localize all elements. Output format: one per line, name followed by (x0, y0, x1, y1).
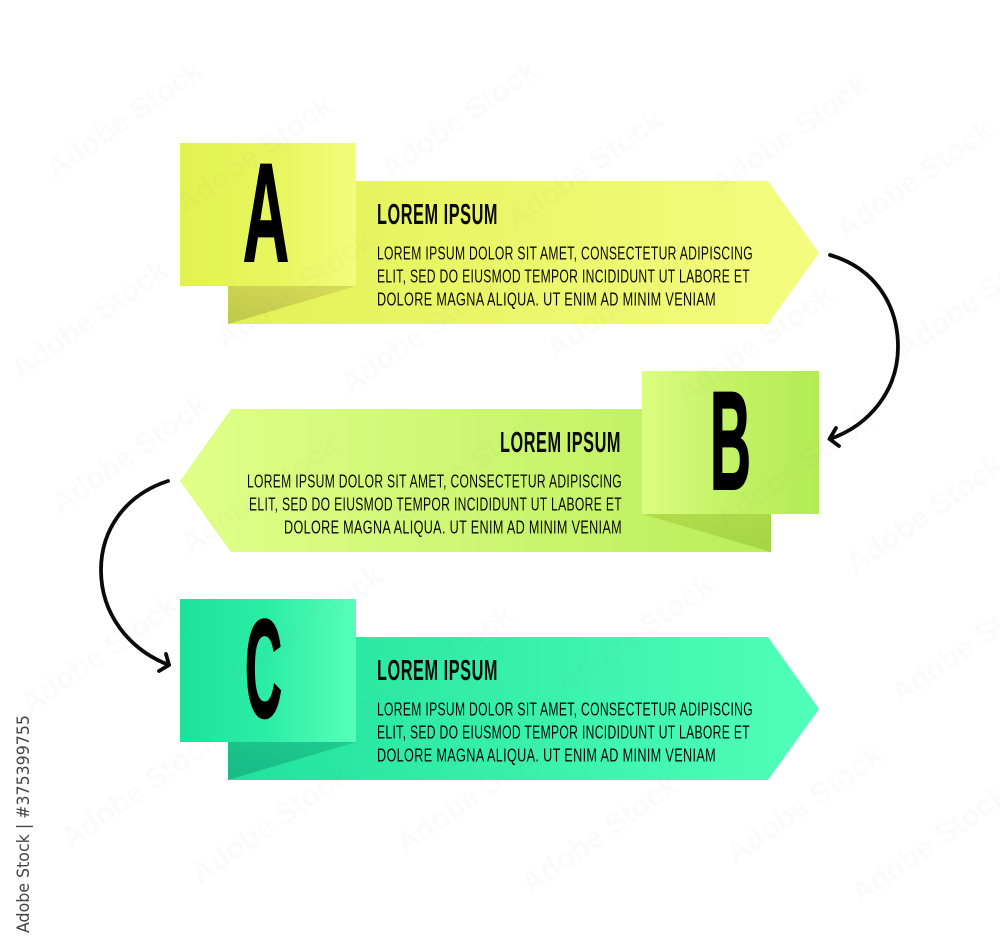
watermark pattern: Adobe Stock (170, 88, 339, 221)
watermark pattern: Adobe Stock (185, 758, 354, 891)
panel: B (180, 362, 819, 552)
heading: B: LOREM IPSUM (500, 427, 621, 459)
watermark pattern: Adobe Stock (175, 428, 344, 561)
text block: B (247, 470, 622, 538)
text block: B: DOLORE MAGNA ALIQUA. UT ENIM AD MINIM VENIAM (284, 516, 622, 538)
heading: C: LOREM IPSUM (377, 655, 498, 687)
text block: A: ELIT, SED DO EIUSMOD TEMPOR INCIDIDUNT UT LABORE ET (377, 266, 750, 286)
watermark pattern: Adobe Stock (670, 278, 839, 411)
heading: A: LOREM IPSUM (377, 199, 498, 231)
watermark pattern: Adobe Stock (210, 223, 379, 356)
watermark pattern: Adobe Stock (830, 113, 999, 246)
watermark pattern: Adobe Stock (15, 588, 184, 721)
panel: A: A (243, 134, 289, 291)
watermark pattern: Adobe Stock (55, 723, 224, 856)
text block: A: DOLORE MAGNA ALIQUA. UT ENIM AD MINIM VENIAM (377, 288, 716, 310)
watermark pattern: Adobe Stock (710, 403, 879, 536)
watermark pattern: Adobe Stock (705, 68, 874, 201)
band: A arrow (228, 181, 819, 324)
panel: A (180, 134, 819, 324)
watermark pattern: Adobe Stock (335, 268, 504, 401)
watermark pattern: Adobe Stock (550, 568, 719, 701)
panel: B: B (710, 362, 751, 519)
watermark pattern: Adobe Stock (40, 53, 209, 186)
text block: A (377, 242, 753, 310)
watermark pattern: Adobe Stock (500, 103, 669, 236)
text block: B: ELIT, SED DO EIUSMOD TEMPOR INCIDIDUNT UT LABORE ET (249, 494, 622, 514)
watermark pattern: Adobe Stock (350, 598, 519, 731)
watermark pattern: Adobe Stock (720, 738, 889, 871)
watermark pattern: Adobe Stock (390, 728, 559, 861)
letter tab: B (642, 371, 819, 514)
letter tab: C (180, 599, 356, 742)
watermark pattern: Adobe Stock (540, 233, 709, 366)
stock credit: Adobe Stock | #375399755 (14, 715, 34, 933)
panel: C: C (245, 590, 282, 747)
watermark pattern: Adobe Stock (220, 558, 389, 691)
text block: C: LOREM IPSUM DOLOR SIT AMET, CONSECTETUR ADIPISCING (377, 698, 753, 720)
arrow: A to B (830, 255, 898, 446)
fold shadow: A (228, 286, 356, 324)
text block: A: LOREM IPSUM DOLOR SIT AMET, CONSECTETUR ADIPISCING (377, 242, 753, 264)
fold shadow: B (642, 514, 771, 552)
watermark pattern: Adobe Stock (515, 768, 684, 901)
arrow: B to C (101, 481, 169, 671)
letter tab: A (180, 143, 356, 286)
band: C arrow (228, 637, 819, 780)
text block: C: DOLORE MAGNA ALIQUA. UT ENIM AD MINIM VENIAM (377, 744, 716, 766)
fold shadow: C (228, 742, 356, 780)
text block: C (377, 698, 753, 766)
text block: C: ELIT, SED DO EIUSMOD TEMPOR INCIDIDUNT UT LABORE ET (377, 722, 750, 742)
watermark pattern: Adobe Stock (45, 388, 214, 521)
band: B arrow (180, 409, 771, 552)
text block: B: LOREM IPSUM DOLOR SIT AMET, CONSECTETUR ADIPISCING (247, 470, 622, 492)
watermark pattern: Adobe Stock (380, 403, 549, 536)
watermark pattern: Adobe Stock (375, 53, 544, 186)
watermark pattern: Adobe Stock (5, 253, 174, 386)
panel: C (180, 590, 819, 780)
